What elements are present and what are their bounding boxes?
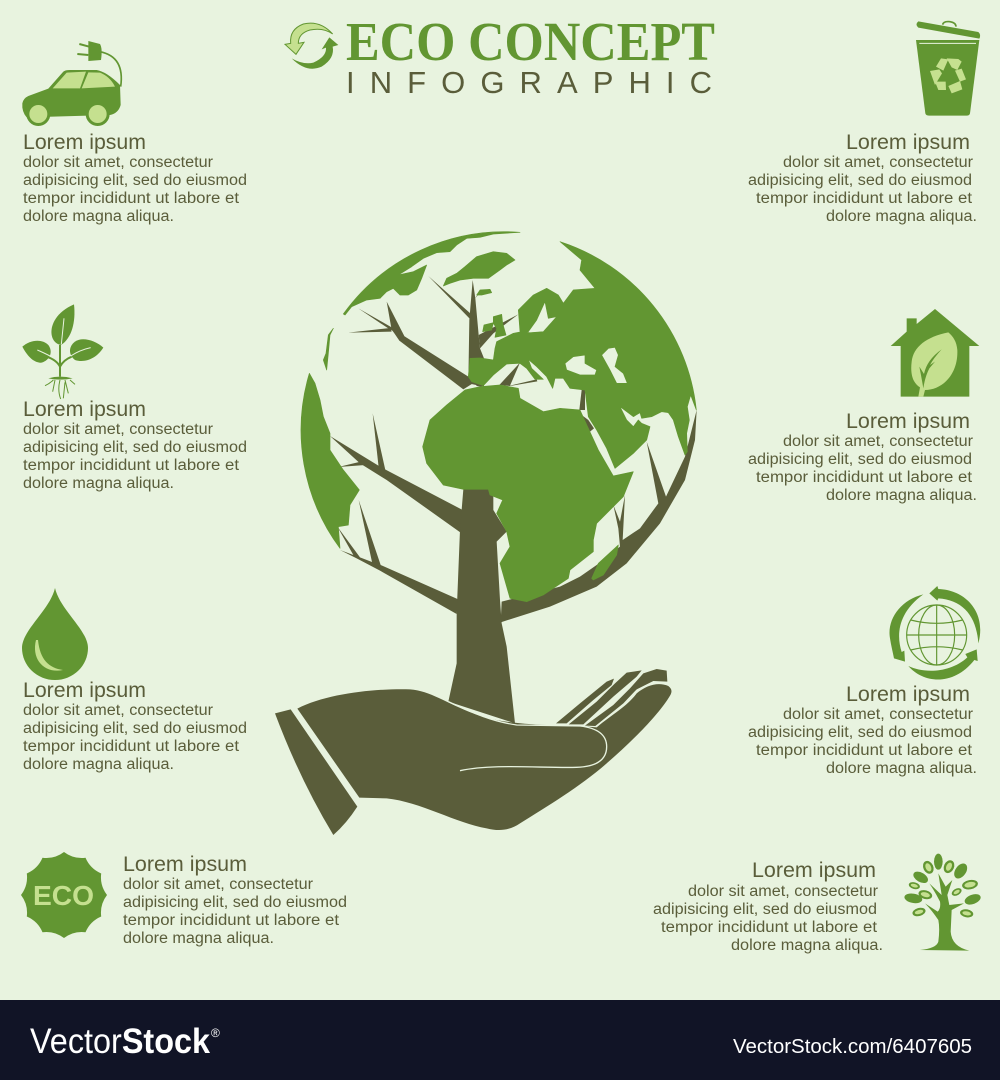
icon: sprout with roots bbox=[22, 304, 103, 399]
text: recycling bin description: dolore magna aliqua. bbox=[826, 208, 977, 225]
text: water drop description: Lorem ipsum bbox=[23, 679, 146, 702]
heading: eco concept: ECO CONCEPT bbox=[346, 11, 715, 72]
text: sprout description bbox=[23, 398, 247, 492]
finger: ring bbox=[569, 670, 642, 724]
text: water drop description: adipisicing elit, sed do eiusmod bbox=[23, 720, 247, 737]
land: britain bbox=[493, 314, 506, 337]
text: eco badge description: dolore magna aliqua. bbox=[123, 930, 274, 947]
registered mark: ® bbox=[211, 1026, 220, 1040]
text: water drop description: dolor sit amet, consectetur bbox=[23, 702, 213, 719]
title block bbox=[285, 11, 715, 100]
text: green house description: Lorem ipsum bbox=[846, 410, 970, 433]
hand bbox=[275, 669, 671, 835]
text: recycling bin description: tempor incididunt ut labore et bbox=[756, 190, 973, 207]
text: recycling bin description: adipisicing elit, sed do eiusmod bbox=[748, 172, 972, 189]
icon: eco badge bbox=[21, 852, 107, 938]
text: eco badge description: dolor sit amet, consectetur bbox=[123, 876, 313, 893]
text: eco badge description bbox=[123, 853, 347, 947]
footer image id: VectorStock.com/6407605 bbox=[733, 1036, 972, 1058]
text: water drop description: tempor incididunt ut labore et bbox=[23, 738, 240, 755]
icon: electric car bbox=[22, 41, 121, 126]
text: electric car description bbox=[23, 131, 247, 225]
text: tree description: adipisicing elit, sed do eiusmod bbox=[653, 901, 877, 918]
land: eurasia bbox=[468, 242, 696, 468]
text: sprout description: dolore magna aliqua. bbox=[23, 475, 174, 492]
text: green house description: dolore magna aliqua. bbox=[826, 487, 977, 504]
panel: tree bbox=[653, 854, 982, 954]
land: central america bbox=[323, 328, 333, 370]
text: sprout description: dolor sit amet, consectetur bbox=[23, 421, 213, 438]
footer band bbox=[0, 1000, 1000, 1080]
tree branches bbox=[330, 276, 697, 622]
land: greenland bbox=[443, 252, 515, 286]
lower left branches and trunk bbox=[337, 489, 515, 723]
text: electric car description: tempor incididunt ut labore et bbox=[23, 190, 240, 207]
text: tree description: dolor sit amet, consectetur bbox=[688, 883, 878, 900]
text: global recycling description bbox=[748, 683, 977, 777]
central illustration: globe tree and hand bbox=[275, 232, 697, 835]
land: africa bbox=[423, 385, 633, 602]
text: recycling bin description: dolor sit amet, consectetur bbox=[783, 154, 973, 171]
panel: eco badge bbox=[21, 852, 347, 947]
text: water drop description: dolore magna aliqua. bbox=[23, 756, 174, 773]
panel: recycling bin bbox=[748, 21, 980, 225]
footer logo: VectorStock bbox=[30, 1022, 210, 1061]
text: tree description: Lorem ipsum bbox=[752, 859, 876, 882]
icon: globe with arrows bbox=[889, 586, 980, 680]
panel: water drop bbox=[22, 588, 247, 773]
text: global recycling description: dolore magna aliqua. bbox=[826, 760, 977, 777]
text: tree description: tempor incididunt ut labore et bbox=[661, 919, 878, 936]
icon: house with leaf bbox=[891, 309, 979, 397]
hand silhouette bbox=[297, 684, 671, 830]
text: electric car description: dolore magna aliqua. bbox=[23, 208, 174, 225]
panel: electric car bbox=[22, 41, 247, 225]
land: ireland bbox=[483, 323, 493, 332]
text: tree description bbox=[653, 859, 883, 954]
land: madagascar bbox=[592, 545, 618, 580]
text: recycling bin description bbox=[748, 131, 977, 225]
text: tree description: dolore magna aliqua. bbox=[731, 937, 883, 954]
hand cuff bbox=[275, 709, 357, 835]
icon: water drop bbox=[22, 588, 88, 680]
text: eco badge description: tempor incididunt ut labore et bbox=[123, 912, 340, 929]
text: green house description bbox=[748, 410, 977, 504]
text: eco badge description: Lorem ipsum bbox=[123, 853, 247, 876]
text: green house description: tempor incididunt ut labore et bbox=[756, 469, 973, 486]
tree trunk bbox=[448, 489, 515, 723]
text: green house description: adipisicing elit, sed do eiusmod bbox=[748, 451, 972, 468]
text: electric car description: dolor sit amet, consectetur bbox=[23, 154, 213, 171]
text: sprout description: adipisicing elit, sed do eiusmod bbox=[23, 439, 247, 456]
text: sprout description: tempor incididunt ut labore et bbox=[23, 457, 240, 474]
hand outlines bbox=[448, 702, 607, 771]
text: recycling bin description: Lorem ipsum bbox=[846, 131, 970, 154]
land: iceland bbox=[477, 289, 492, 295]
text: eco badge description: adipisicing elit, sed do eiusmod bbox=[123, 894, 347, 911]
text: sprout description: Lorem ipsum bbox=[23, 398, 146, 421]
icon: recycling bin bbox=[916, 21, 980, 116]
finger: middle bbox=[585, 669, 667, 726]
panel: global recycling bbox=[748, 586, 980, 777]
text: water drop description bbox=[23, 679, 247, 773]
subheading: infographic: INFOGRAPHIC bbox=[346, 65, 712, 100]
land: north america bbox=[343, 232, 520, 315]
text: electric car description: Lorem ipsum bbox=[23, 131, 146, 154]
text: global recycling description: adipisicing elit, sed do eiusmod bbox=[748, 724, 972, 741]
finger: pinky bbox=[556, 679, 614, 723]
text: global recycling description: dolor sit amet, consectetur bbox=[783, 706, 973, 723]
text: global recycling description: tempor incididunt ut labore et bbox=[756, 742, 973, 759]
panel: sprout bbox=[22, 304, 247, 492]
text: green house description: dolor sit amet, consectetur bbox=[783, 433, 973, 450]
icon: recycling arrows bbox=[285, 23, 338, 69]
icon: eco badge: ECO bbox=[33, 880, 94, 911]
panel: green house bbox=[748, 309, 979, 504]
globe land masses bbox=[301, 232, 696, 602]
text: global recycling description: Lorem ipsum bbox=[846, 683, 970, 706]
land: south america bbox=[301, 373, 359, 548]
text: electric car description: adipisicing elit, sed do eiusmod bbox=[23, 172, 247, 189]
icon: leafy tree bbox=[904, 854, 982, 951]
